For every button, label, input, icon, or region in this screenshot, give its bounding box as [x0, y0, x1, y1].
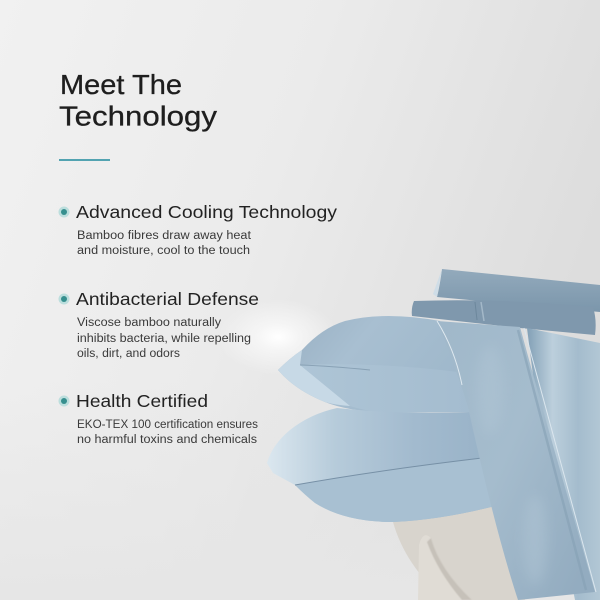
top pillow: [278, 316, 472, 413]
bottom pillow: [267, 408, 495, 522]
title: Technology: [59, 100, 217, 132]
body text: no harmful toxins and chemicals: [77, 434, 257, 446]
body text: Viscose bamboo naturally: [77, 317, 221, 329]
title: [59, 69, 217, 132]
photo: bedding on stone stool: [267, 269, 600, 600]
feature: antibacterial: [58, 289, 259, 360]
feature: certified: [58, 391, 258, 446]
heading: Advanced Cooling Technology: [76, 202, 337, 222]
body text: and moisture, cool to the touch: [77, 245, 250, 257]
heading: Antibacterial Defense: [76, 289, 259, 309]
body text: [77, 230, 252, 257]
body text: [77, 419, 258, 446]
background lower shade: [0, 380, 600, 600]
icon: bullet: [58, 396, 70, 406]
stone stool: [393, 505, 525, 600]
light glow: [218, 299, 338, 375]
title accent line: [59, 159, 110, 161]
feature: cooling: [58, 202, 337, 257]
icon: bullet: [58, 294, 70, 304]
rolled sheet lower: [412, 300, 596, 335]
heading: Health Certified: [76, 391, 208, 411]
right sheet fold: [527, 328, 600, 600]
body text: oils, dirt, and odors: [77, 348, 180, 360]
body text: Bamboo fibres draw away heat: [77, 230, 252, 242]
icon: bullet: [58, 206, 70, 218]
rolled sheet top: [433, 269, 600, 312]
body text: [77, 317, 251, 360]
title: Meet The: [60, 69, 182, 100]
draped sheet: [437, 321, 596, 600]
body text: EKO-TEX 100 certification ensures: [77, 419, 258, 431]
body text: inhibits bacteria, while repelling: [77, 333, 251, 345]
